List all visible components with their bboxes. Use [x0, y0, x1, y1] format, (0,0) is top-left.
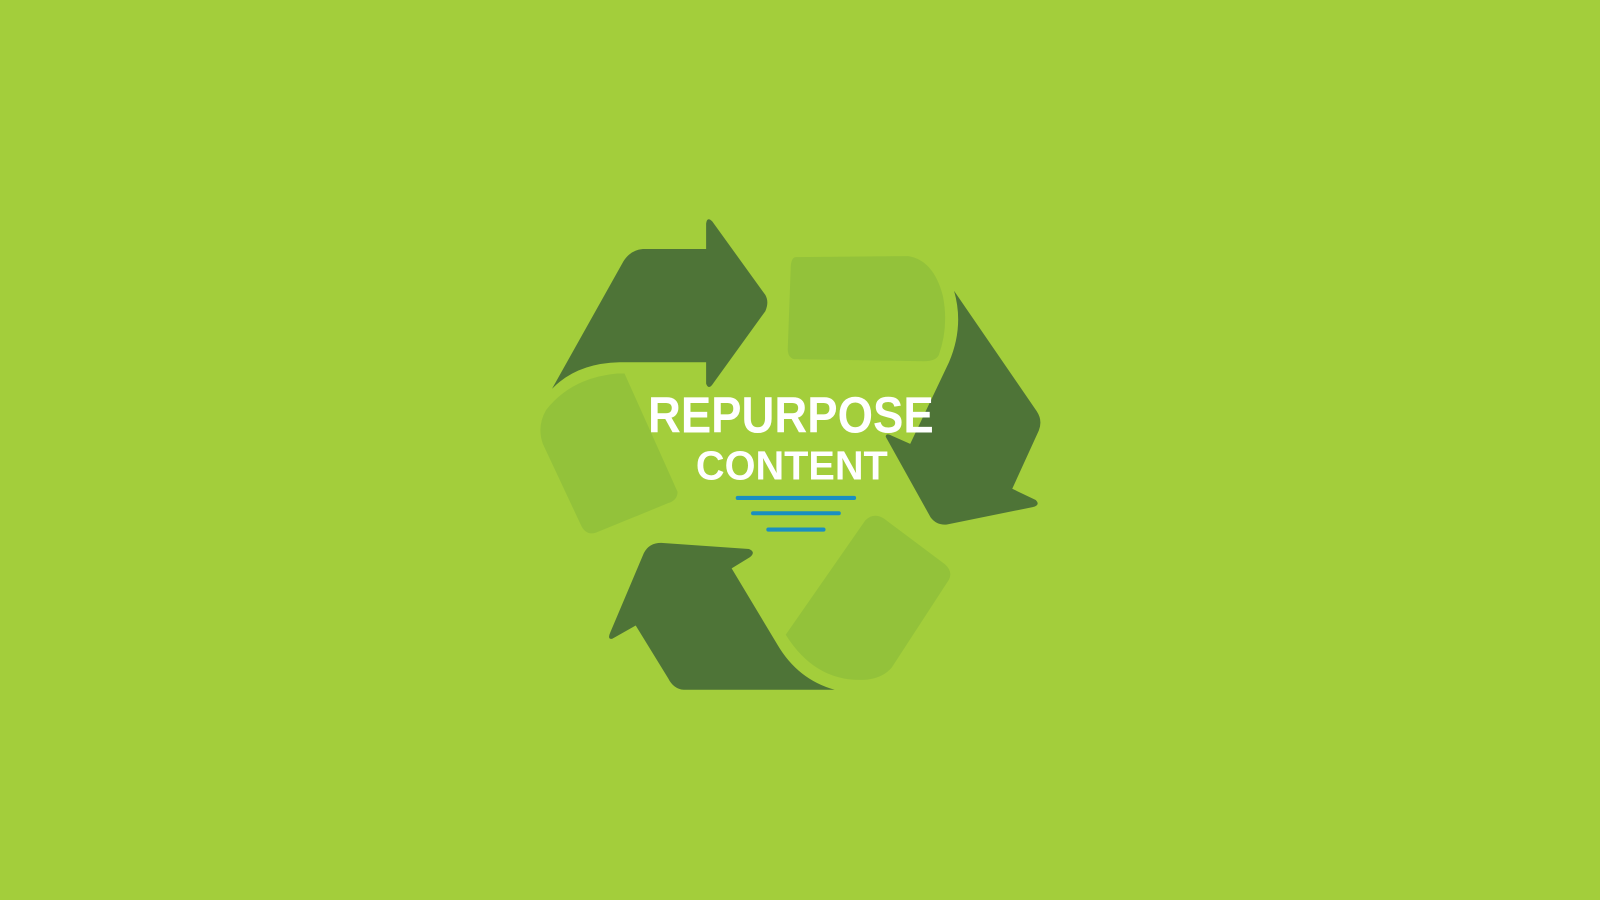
arrow: top left [552, 219, 767, 389]
light blob: bottom right [786, 516, 950, 680]
recycle symbol [540, 219, 1040, 690]
arrow: bottom [609, 543, 835, 690]
light blob: left [540, 373, 678, 533]
light blob: top [788, 256, 945, 361]
decorative blue lines under title [738, 498, 854, 530]
title: REPURPOSE: REPURPOSE [648, 387, 934, 444]
subtitle: CONTENT: CONTENT [696, 443, 888, 489]
arrow: right [886, 291, 1040, 525]
